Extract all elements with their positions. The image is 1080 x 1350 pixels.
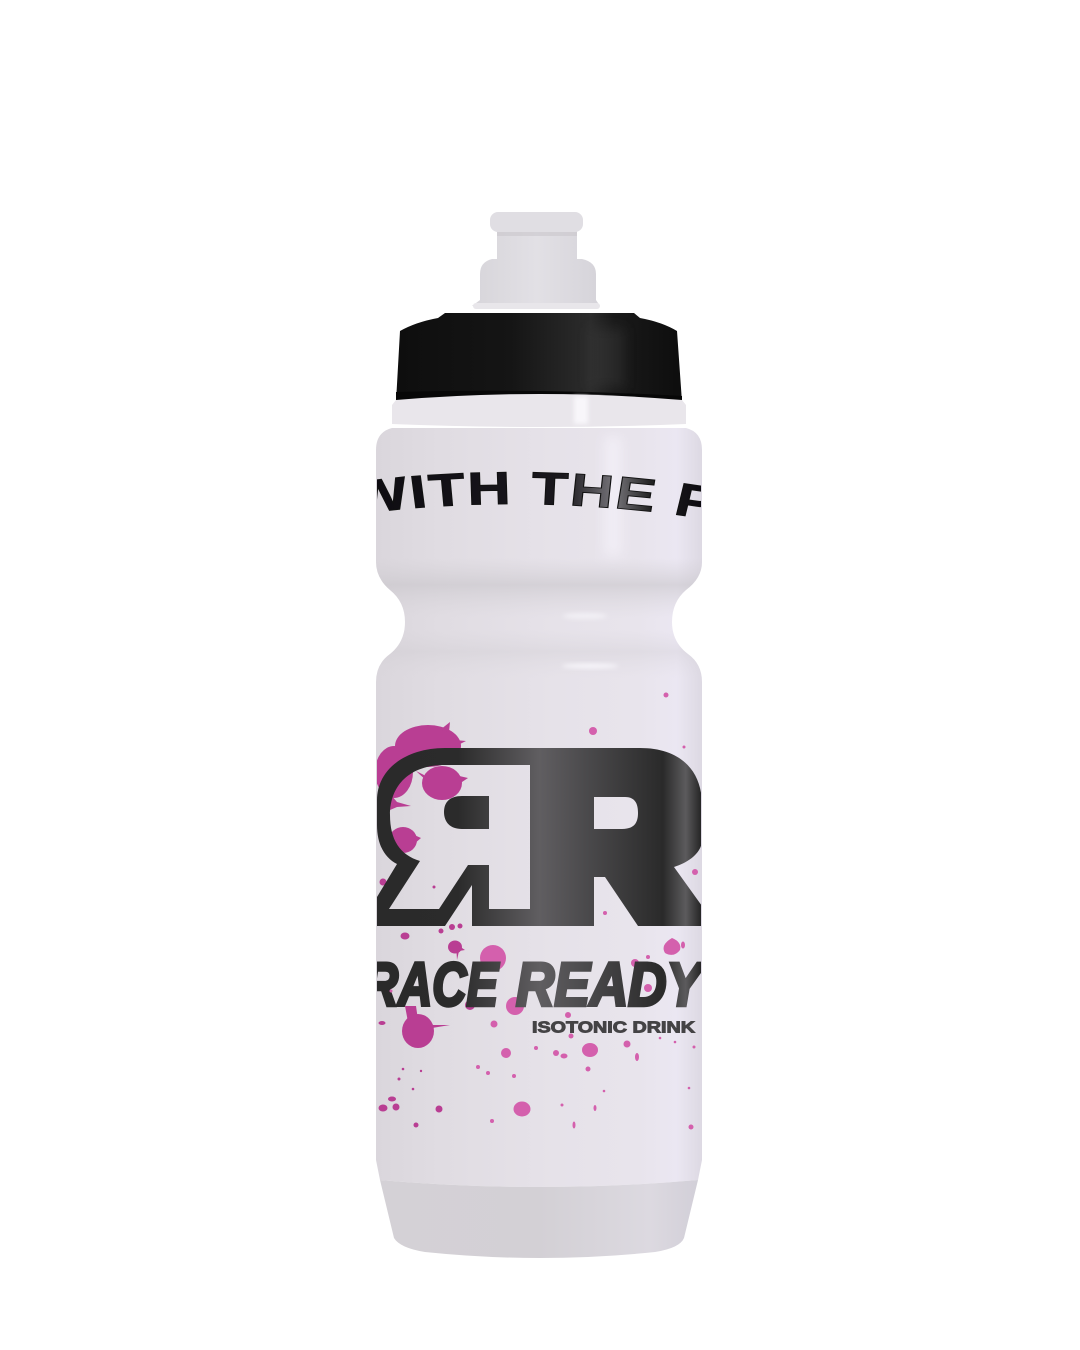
curved slogan: WITH THE P: [377, 472, 701, 516]
RR logo: [377, 748, 702, 926]
light pink paint splatter: [476, 692, 698, 1130]
nozzle: collar: [472, 259, 600, 309]
brand name: RACE READY: RACE: [364, 950, 500, 1018]
water bottle: [376, 212, 702, 1258]
curved slogan: [377, 472, 701, 516]
neck band: [392, 394, 686, 427]
black cap: [396, 313, 682, 402]
bottle body: [376, 428, 702, 1187]
brand name: RACE READY: [377, 960, 701, 1008]
pink paint splatter: [375, 722, 475, 1128]
brand name: RACE READY: READY: [516, 950, 707, 1018]
nozzle: top valve: [490, 212, 583, 264]
base: [380, 1180, 698, 1258]
product type: ISOTONIC DRINK: ISOTONIC DRINK: [532, 1020, 696, 1036]
pink specks over brand name: [390, 984, 652, 992]
body shading: [381, 442, 699, 668]
